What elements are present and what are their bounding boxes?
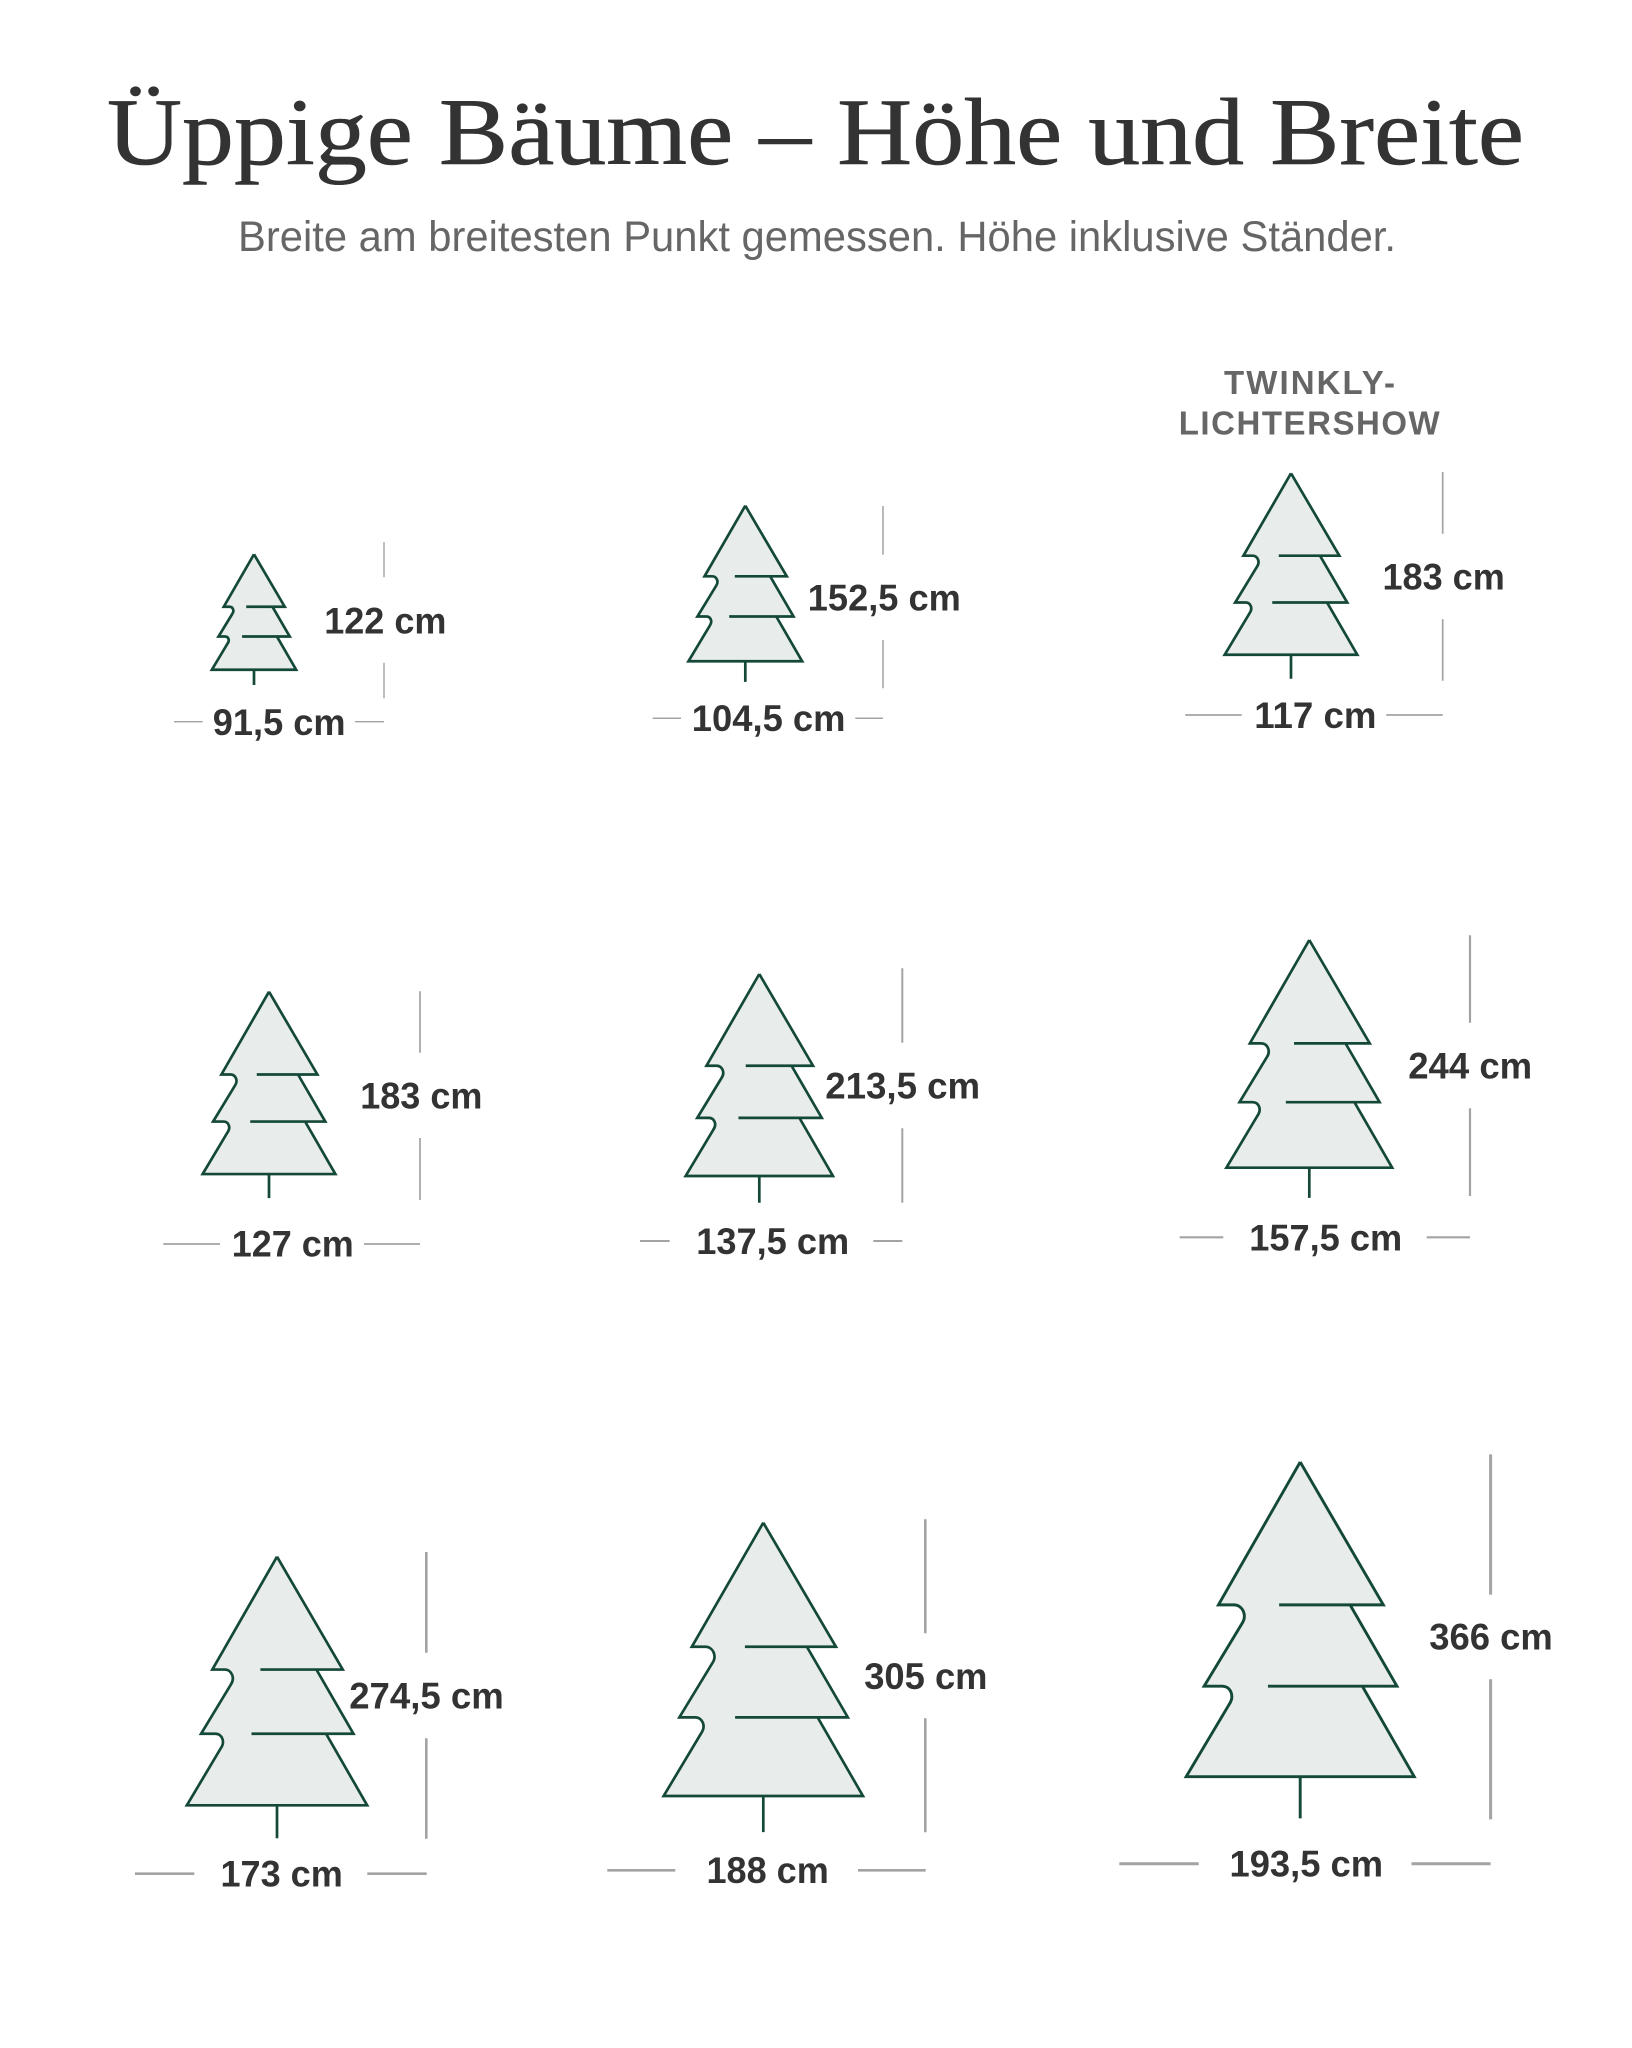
width label: 127 cm [232,1224,354,1264]
panel: tree 183 cm by 127 cm [163,991,483,1264]
width dimension line [163,1243,420,1245]
panel: tree 305 cm by 188 cm [607,1519,988,1891]
panel: tree 274.5 cm by 173 cm [135,1552,504,1894]
width label: 188 cm [706,1850,829,1891]
width label: 104,5 cm [692,698,846,739]
width label: 157,5 cm [1249,1217,1402,1258]
width label: 137,5 cm [696,1221,849,1262]
height dimension line [425,1552,428,1839]
icon: tree [1225,473,1357,679]
height dimension line [901,968,903,1203]
width dimension line [640,1240,902,1242]
width dimension line [607,1869,926,1872]
panel: tree 122 cm by 91.5 cm [174,542,446,743]
icon: tree [203,992,335,1198]
height dimension line [419,991,421,1200]
icon: tree [686,974,833,1203]
height dimension line [1489,1454,1492,1819]
height dimension line [383,542,385,698]
height dimension line [924,1519,927,1832]
height dimension line [882,506,884,688]
subtitle: Breite am breitesten Punkt gemessen. Höhe inklusive Ständer. [238,213,1396,261]
height label: 213,5 cm [825,1066,980,1107]
title: Üppige Bäume – Höhe und Breite [107,79,1524,185]
width dimension line [135,1872,427,1875]
height label: 244 cm [1408,1046,1532,1087]
width label: 173 cm [220,1853,343,1894]
width dimension line [1180,1236,1470,1238]
callout: Twinkly label: LICHTERSHOW [1179,405,1441,442]
height label: 183 cm [360,1075,482,1116]
height label: 122 cm [324,600,446,641]
height label: 305 cm [864,1656,988,1697]
icon: tree [1226,940,1392,1198]
width dimension line [174,721,384,723]
width label: 91,5 cm [213,702,346,743]
width dimension line [653,717,883,719]
height label: 152,5 cm [808,578,961,619]
width dimension line [1185,714,1443,716]
width dimension line [1119,1862,1491,1865]
height label: 183 cm [1382,556,1505,597]
panel: Twinkly-Lichtershow tree 183 cm by 117 cm [1179,364,1505,736]
height label: 274,5 cm [349,1676,504,1716]
panel: tree 366 cm by 193.5 cm [1119,1454,1553,1884]
callout: Twinkly label: TWINKLY- [1224,364,1395,401]
callout: Twinkly label [1179,364,1441,442]
height dimension line [1442,472,1444,681]
panel: tree 244 cm by 157.5 cm [1180,935,1532,1258]
icon: tree [1186,1462,1414,1818]
icon: tree [212,554,296,685]
height dimension line [1469,935,1471,1196]
width label: 193,5 cm [1230,1844,1383,1884]
width label: 117 cm [1254,695,1376,736]
height label: 366 cm [1429,1617,1553,1658]
icon: tree [664,1523,863,1832]
panel: tree 213.5 cm by 137.5 cm [640,968,980,1262]
icon: tree [688,506,802,682]
panel: tree 152.5 cm by 104.5 cm [653,506,961,739]
icon: tree [187,1557,367,1838]
